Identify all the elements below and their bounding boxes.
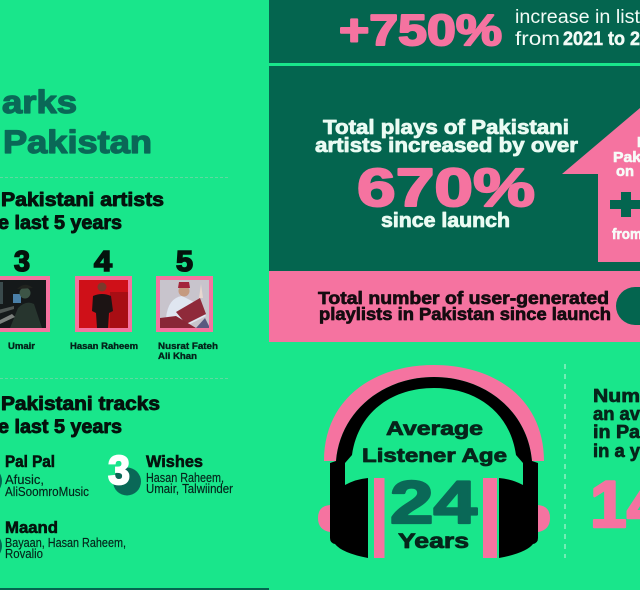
text: average playlists per year [590, 386, 640, 541]
title [2, 84, 152, 160]
panel: total plays [315, 117, 578, 232]
artist rank 4: 4 [94, 246, 112, 278]
heading: top artists: e last 5 years [0, 212, 122, 234]
text: increase in listening [515, 7, 640, 50]
icon: plus sign [610, 192, 640, 217]
icon: headphones with average listener age [318, 365, 550, 558]
track: Pal Pal: AliSoomroMusic [5, 485, 89, 499]
track: Wishes: Umair, Talwiinder [146, 482, 233, 496]
panel: total plays: since launch [381, 210, 510, 232]
heading: top artists: Pakistani artists [1, 189, 164, 211]
artist rank 4 [70, 246, 138, 351]
artist rank 5: 5 [176, 246, 193, 278]
track: Pal Pal: Afusic, [5, 473, 44, 487]
text: average playlists per year: in a y [593, 441, 640, 461]
track: Maand: Bayaan, Hasan Raheem, [5, 536, 126, 550]
arrow callout: on [616, 164, 634, 180]
text: average playlists per year: Num [593, 386, 640, 406]
track: Maand: Maand [5, 518, 58, 537]
text: average playlists per year: an av [593, 404, 640, 424]
stat: +750%: +750% [339, 6, 502, 55]
artist rank 5: Nusrat Fateh [158, 341, 218, 351]
artist rank 5 [156, 246, 218, 361]
track: Wishes [108, 447, 233, 496]
title: Pakistan [3, 124, 152, 160]
artist rank 5: Ali Khan [158, 351, 197, 361]
track: Maand: Rovalio [5, 547, 43, 561]
artist rank 3 [0, 246, 50, 351]
text: average listener age [362, 419, 507, 553]
arrow callout [562, 91, 640, 262]
track: Pal Pal [0, 452, 89, 499]
artist rank 3: Umair [8, 341, 36, 351]
arrow callout: Pak [613, 150, 640, 166]
text: increase in listening: from [515, 29, 560, 50]
heading: top artists [0, 189, 164, 234]
artist rank 3: 3 [14, 246, 30, 278]
heading: top tracks: Pakistani tracks [1, 393, 160, 415]
track: Maand [0, 518, 126, 561]
panel: user-generated playlists: Total number of user-generated [318, 288, 609, 308]
stat: 24: 24 [390, 469, 478, 536]
heading: top tracks [0, 393, 160, 438]
track: Wishes: 3 [108, 447, 130, 493]
text: increase in listening: increase in list [515, 7, 640, 28]
track: Pal Pal: Pal Pal [5, 452, 55, 471]
stat: 670%: 670% [357, 158, 535, 218]
panel: total plays: artists increased by over [315, 135, 578, 157]
panel: user-generated playlists [269, 271, 640, 342]
panel: total plays: Total plays of Pakistani [323, 117, 569, 139]
title: arks [2, 84, 77, 120]
heading: top tracks: e last 5 years [0, 416, 122, 438]
pill: playlist count [616, 287, 640, 325]
text: average listener age: Average [386, 419, 483, 440]
track: Wishes: Hasan Raheem, [146, 471, 224, 485]
text: average listener age: Years [398, 530, 469, 553]
panel: listening increase banner [269, 0, 640, 271]
artist rank 4: Hasan Raheem [70, 341, 138, 351]
panel: user-generated playlists: playlists in Pakistan since launch [319, 304, 611, 324]
text: average playlists per year: in Pa [593, 422, 640, 442]
track: Wishes: Wishes [146, 452, 203, 471]
text: average listener age: Listener Age [362, 446, 507, 467]
panel: left summary [0, 0, 269, 590]
